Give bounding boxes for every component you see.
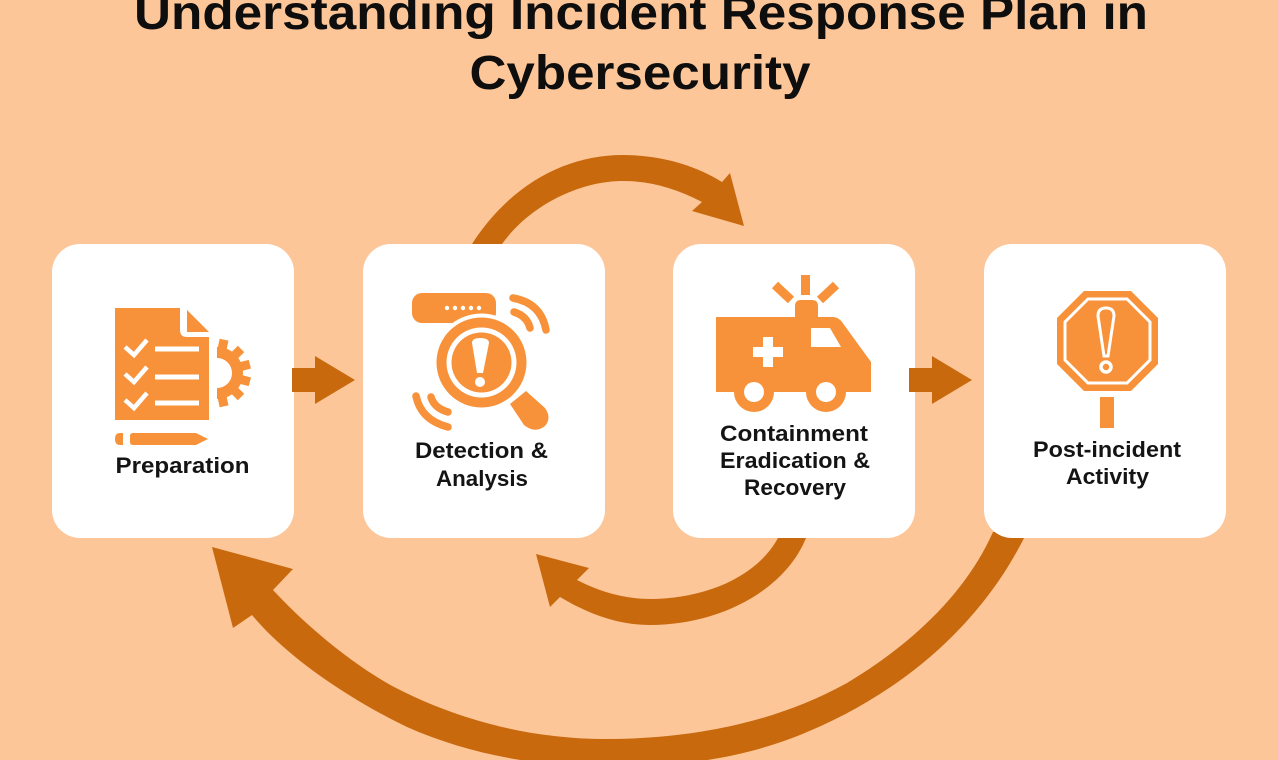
label: Post-incident Activity: Activity bbox=[1066, 464, 1150, 489]
label: Containment Eradication & Recovery: Containment bbox=[720, 421, 869, 446]
icon: ambulance bbox=[716, 275, 871, 412]
panel: preparation bbox=[52, 244, 294, 538]
arrow: large curved from post-incident to preparation bbox=[212, 532, 1027, 760]
label: Post-incident Activity bbox=[1033, 437, 1182, 489]
panel: containment bbox=[673, 244, 915, 538]
label: Detection & Analysis: Detection & bbox=[415, 438, 548, 463]
label: Detection & Analysis: Analysis bbox=[436, 466, 528, 491]
label: Containment Eradication & Recovery: Eradication & bbox=[720, 448, 870, 473]
arrow: bottom curved from containment to detection bbox=[536, 538, 806, 625]
panel: detection and analysis bbox=[363, 244, 605, 538]
icon: magnifier with alert bbox=[412, 293, 548, 430]
arrow: top curved from detection to containment bbox=[472, 155, 744, 244]
arrow: preparation to detection bbox=[292, 356, 355, 404]
label: Containment Eradication & Recovery bbox=[720, 421, 870, 500]
arrow: containment to post-incident bbox=[909, 356, 972, 404]
label: Detection & Analysis bbox=[415, 438, 548, 491]
label: Containment Eradication & Recovery: Recovery bbox=[744, 475, 847, 500]
icon: octagon warning sign bbox=[1057, 291, 1158, 428]
title bbox=[134, 0, 1148, 100]
label: Post-incident Activity: Post-incident bbox=[1033, 437, 1182, 462]
panel: post-incident activity bbox=[984, 244, 1226, 538]
title: Cybersecurity bbox=[470, 47, 811, 100]
icon: checklist document with gear bbox=[115, 308, 251, 445]
label: Preparation: Preparation bbox=[116, 453, 250, 478]
